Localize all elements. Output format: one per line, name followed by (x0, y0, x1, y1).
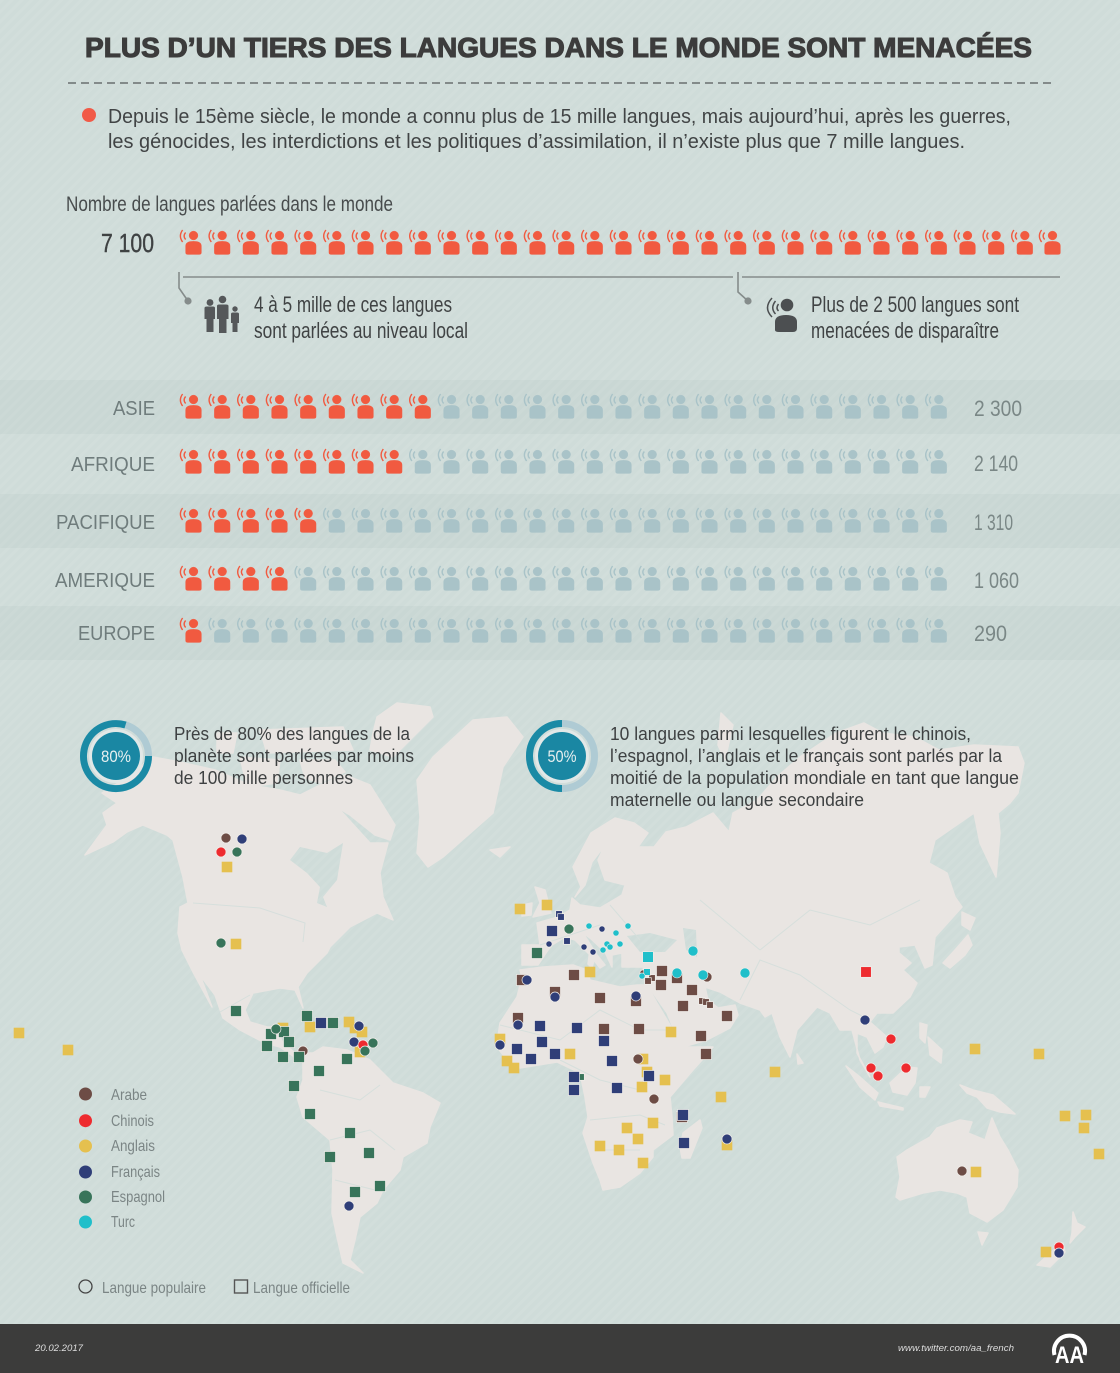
row: Asie: 2 300 (974, 396, 1022, 421)
row: Pacifique: 1 310 (974, 510, 1013, 535)
icon: family (204, 296, 239, 333)
text: 80%: de 100 mille personnes (174, 768, 353, 788)
Greenland (417, 717, 523, 867)
South America (297, 1047, 440, 1273)
legend: languages (79, 1087, 165, 1231)
text: 80%: Près de 80% des langues de la (174, 724, 411, 744)
text: 80% (174, 724, 414, 788)
heading: number of languages: Nombre de langues parlées dans le monde (66, 193, 393, 216)
text: local languages: 4 à 5 mille de ces langues (254, 292, 452, 317)
markers: Espagnol (overlapping dots) (360, 1038, 378, 1056)
markers: Arabe (221, 833, 967, 1176)
Africa (497, 965, 713, 1190)
Australia (896, 1118, 1018, 1222)
text: endangered languages: menacées de disparaître (811, 318, 999, 343)
intro text block: Depuis le 15ème siècle, le monde a connu plus de 15 mille langues, mais aujourd’hui, après les guerres, (108, 106, 1011, 128)
Eurasia (522, 723, 1024, 1077)
row: Pacifique: PACIFIQUE (56, 512, 155, 534)
total number: 7 100 (101, 228, 154, 258)
row: Afrique: 2 140 (974, 451, 1018, 476)
text: endangered languages: Plus de 2 500 langues sont (811, 292, 1019, 317)
markers: Anglais (14, 862, 1104, 1257)
legend: official language: Langue officielle (253, 1280, 350, 1297)
text: 50%: moitié de la population mondiale en tant que langue (610, 768, 1019, 788)
row: Afrique (71, 449, 1018, 476)
row: Amerique (55, 566, 1019, 593)
row: Amerique: 1 060 (974, 568, 1019, 593)
text: endangered languages (811, 292, 1019, 343)
row: Asie (113, 394, 1022, 421)
donut: 80%: 80% (101, 747, 131, 766)
markers: Espagnol (216, 847, 584, 1198)
footer (0, 1324, 1120, 1373)
row: Europe: 290 (974, 621, 1007, 646)
row: Asie: ASIE (113, 398, 155, 420)
borders (193, 900, 920, 1190)
title: PLUS D’UN TIERS DES LANGUES DANS LE MONDE SONT MENACÉES (85, 32, 1032, 63)
markers: Turc (586, 923, 750, 980)
bracket: endangered languages (738, 272, 1060, 305)
text: 50%: l’espagnol, l’anglais et le français sont parlés par la (610, 746, 1003, 766)
markers: Chinois (216, 847, 1064, 1252)
legend: languages: Français (111, 1164, 160, 1181)
text: 50%: 10 langues parmi lesquelles figurent le chinois, (610, 724, 971, 744)
markers: Français (237, 834, 870, 1211)
inland seas (290, 843, 697, 957)
row: Europe (78, 618, 1007, 646)
text: local languages: sont parlées au niveau local (254, 318, 468, 343)
twitter address: www.twitter.com/aa_french (898, 1343, 1014, 1354)
text: 80%: planète sont parlées par moins (174, 746, 414, 766)
donut: 50% (530, 724, 594, 788)
donut: 80% (84, 724, 149, 789)
islands (490, 713, 1085, 1267)
logo: AA (1055, 1342, 1084, 1369)
intro text block: les génocides, les interdictions et les politiques d’assimilation, il n’existe plus que 7 mille langues. (108, 131, 965, 153)
icon: speaker (768, 298, 797, 332)
text: local languages (254, 292, 468, 343)
date: 20.02.2017 (34, 1343, 84, 1354)
row: Amerique: AMERIQUE (55, 570, 155, 592)
bracket: local languages (179, 272, 733, 305)
legend: languages: Espagnol (111, 1189, 165, 1206)
intro text block (82, 106, 1011, 153)
legend: languages: Arabe (111, 1087, 147, 1104)
row: Pacifique (56, 508, 1013, 535)
text: 50%: maternelle ou langue secondaire (610, 790, 864, 810)
legend: languages: Turc (111, 1214, 135, 1231)
world map (85, 703, 1085, 1273)
text: 50% (610, 724, 1019, 810)
logo (1054, 1336, 1085, 1369)
row: Europe: EUROPE (78, 623, 155, 645)
legend: popular language: Langue populaire (102, 1280, 206, 1297)
legend: languages: Chinois (111, 1113, 154, 1130)
marker: Français (New Zealand) (1054, 1248, 1064, 1258)
North America (85, 757, 393, 1063)
icon row: world total (180, 230, 1060, 254)
donut: 50%: 50% (548, 747, 576, 766)
row: Afrique: AFRIQUE (71, 454, 155, 476)
legend: languages: Anglais (111, 1138, 155, 1155)
